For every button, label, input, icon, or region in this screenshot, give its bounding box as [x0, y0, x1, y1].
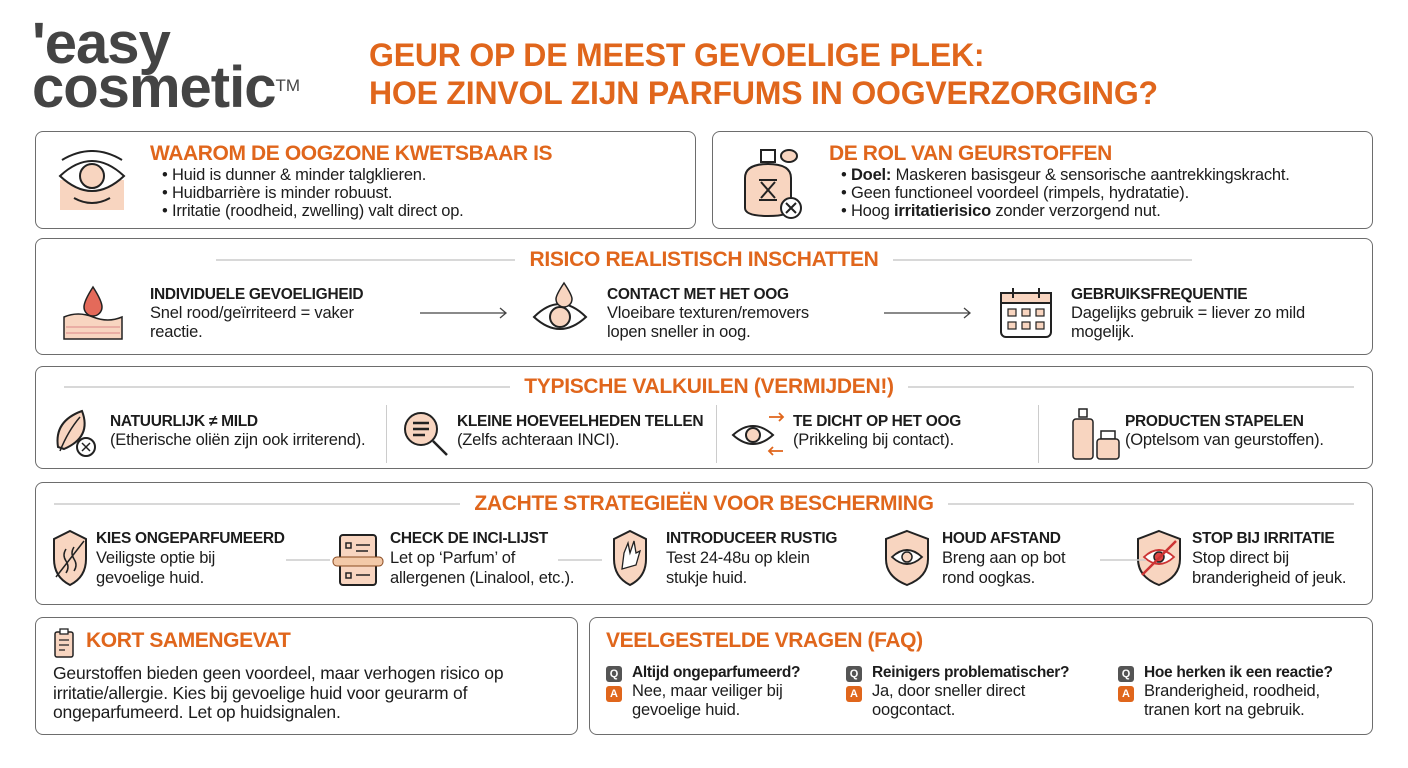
bullets: Hoog irritatierisico zonder verzorgend nut.	[851, 202, 1161, 220]
strategy: kies ongeparfumeerd: gevoelige huid.	[96, 569, 204, 587]
faq 2	[846, 664, 1069, 719]
panel: faq: Nee, maar veiliger bij	[632, 682, 783, 700]
item: gebruiksfrequentie: Dagelijks gebruik = liever zo mild	[1071, 304, 1305, 322]
item: producten stapelen: PRODUCTEN STAPELEN	[1125, 413, 1304, 430]
connector lines	[286, 559, 1146, 561]
panel: faq: Hoe herken ik een reactie?	[1144, 664, 1333, 681]
bullets: Huidbarrière is minder robuust.	[172, 184, 392, 202]
panel: risico realistisch inschatten	[35, 238, 1373, 355]
arrow	[420, 308, 507, 318]
strategy: kies ongeparfumeerd	[53, 530, 285, 587]
panel: faq: Branderigheid, roodheid,	[1144, 682, 1320, 700]
panel: faq: gevoelige huid.	[632, 701, 740, 719]
strategy: introduceer rustig: INTRODUCEER RUSTIG	[666, 530, 837, 547]
item: gebruiksfrequentie: GEBRUIKSFREQUENTIE	[1071, 286, 1247, 303]
faq 1	[606, 664, 800, 719]
icon: clipboard	[54, 628, 74, 658]
strategy: houd afstand: Breng aan op bot	[942, 549, 1065, 567]
strategy: kies ongeparfumeerd: Veiligste optie bij	[96, 549, 215, 567]
panel: faq: Ja, door sneller direct	[872, 682, 1025, 700]
strategy: check inci-lijst: CHECK DE INCI-LIJST	[390, 530, 548, 547]
logo	[32, 11, 300, 120]
strategy: stop bij irritatie	[1137, 530, 1346, 587]
logo: 'easy	[32, 11, 170, 76]
panel: rol van geurstoffen	[712, 131, 1373, 229]
item: producten stapelen	[1038, 405, 1358, 463]
strategy: check inci-lijst	[332, 530, 574, 587]
panel: zachte strategieen	[35, 482, 1373, 605]
item: te dicht op het oog: TE DICHT OP HET OOG	[793, 413, 961, 430]
section title: TYPISCHE VALKUILEN (VERMIJDEN!)	[524, 375, 894, 398]
icon: eye arrows	[732, 412, 784, 456]
heading: VEELGESTELDE VRAGEN (FAQ)	[606, 629, 923, 652]
bullets	[162, 166, 464, 220]
icon: eye drop	[532, 282, 588, 330]
summary text: Geurstoffen bieden geen voordeel, maar verhogen risico op	[53, 663, 503, 683]
panel: faq: Altijd ongeparfumeerd?	[632, 664, 800, 681]
strategy: check inci-lijst: allergenen (Linalool, etc.).	[390, 569, 574, 587]
item: te dicht op het oog: (Prikkeling bij contact).	[793, 431, 954, 449]
bullets: Irritatie (roodheid, zwelling) valt direct op.	[172, 202, 464, 220]
title: HOE ZINVOL ZIJN PARFUMS IN OOGVERZORGING?	[369, 75, 1158, 111]
item: te dicht op het oog	[716, 405, 1038, 463]
faq 3	[1118, 664, 1333, 719]
icon: eye	[58, 150, 126, 210]
item: contact met het oog: lopen sneller in oog.	[607, 323, 750, 341]
panel: faq	[589, 617, 1373, 735]
item: kleine hoeveelheden: KLEINE HOEVEELHEDEN TELLEN	[457, 413, 703, 430]
strategy: houd afstand: HOUD AFSTAND	[942, 530, 1061, 547]
strategy: stop bij irritatie: Stop direct bij	[1192, 549, 1289, 567]
item: contact met het oog: Vloeibare texturen/removers	[607, 304, 809, 322]
section title: RISICO REALISTISCH INSCHATTEN	[529, 248, 879, 271]
item: individuele gevoeligheid: INDIVIDUELE GEVOELIGHEID	[150, 286, 363, 303]
icon: leaf	[56, 410, 96, 457]
panel: faq: A	[850, 688, 858, 700]
title: GEUR OP DE MEEST GEVOELIGE PLEK:	[369, 37, 984, 73]
panel: waarom oogzone kwetsbaar	[35, 131, 696, 229]
item: kleine hoeveelheden: (Zelfs achteraan INCI).	[457, 431, 619, 449]
item: gebruiksfrequentie	[1071, 286, 1305, 341]
panel: faq: Reinigers problematischer?	[872, 664, 1069, 681]
item: natuurlijk mild	[110, 413, 365, 449]
strategy: stop bij irritatie: STOP BIJ IRRITATIE	[1192, 530, 1334, 547]
panel: faq: tranen kort na gebruik.	[1144, 701, 1304, 719]
summary text: irritatie/allergie. Kies bij gevoelige huid voor geurarm of	[53, 682, 467, 702]
bullets: Doel: Maskeren basisgeur & sensorische aantrekkingskracht.	[851, 166, 1290, 184]
item: individuele gevoeligheid	[150, 286, 363, 341]
strategy: houd afstand: rond oogkas.	[942, 569, 1035, 587]
strategy: introduceer rustig	[613, 530, 837, 587]
bullets: Huid is dunner & minder talgklieren.	[172, 166, 426, 184]
icon: bottles	[1072, 408, 1120, 460]
strategy: introduceer rustig: stukje huid.	[666, 569, 747, 587]
bullets	[842, 166, 1290, 220]
item: natuurlijk mild: (Etherische oliën zijn ook irriterend).	[110, 431, 365, 449]
item: individuele gevoeligheid: reactie.	[150, 323, 203, 341]
strategy: introduceer rustig: Test 24-48u op klein	[666, 549, 810, 567]
panel: faq: oogcontact.	[872, 701, 955, 719]
panel: faq: Q	[610, 668, 618, 680]
panel: faq: A	[610, 688, 618, 700]
panel: faq: A	[1122, 688, 1130, 700]
title	[369, 37, 1158, 111]
item: contact met het oog	[607, 286, 809, 341]
strategy: houd afstand	[885, 530, 1066, 587]
strategy: kies ongeparfumeerd: KIES ONGEPARFUMEERD	[96, 530, 285, 547]
arrow	[884, 308, 971, 318]
icon: skin drop	[63, 286, 123, 340]
heading: DE ROL VAN GEURSTOFFEN	[829, 142, 1112, 165]
icon: magnifier list	[404, 412, 448, 456]
item: gebruiksfrequentie: mogelijk.	[1071, 323, 1134, 341]
item: individuele gevoeligheid: Snel rood/geïrriteerd = vaker	[150, 304, 354, 322]
summary text	[53, 663, 503, 722]
strategy: stop bij irritatie: branderigheid of jeuk.	[1192, 569, 1346, 587]
item: kleine hoeveelheden	[386, 405, 716, 463]
logo: cosmeticTM	[32, 55, 300, 120]
bullets: Geen functioneel voordeel (rimpels, hydratatie).	[851, 184, 1189, 202]
panel: typische valkuilen	[35, 366, 1373, 469]
icon: perfume bottle	[744, 149, 802, 219]
heading: WAAROM DE OOGZONE KWETSBAAR IS	[150, 142, 552, 165]
strategy: check inci-lijst: Let op ‘Parfum’ of	[390, 549, 515, 567]
summary text: ongeparfumeerd. Let op huidsignalen.	[53, 702, 341, 722]
icon: calendar	[1000, 288, 1052, 338]
heading: KORT SAMENGEVAT	[86, 629, 290, 652]
panel: faq: Q	[1122, 668, 1130, 680]
item: contact met het oog: CONTACT MET HET OOG	[607, 286, 789, 303]
item: producten stapelen: (Optelsom van geurstoffen).	[1125, 431, 1324, 449]
section title: ZACHTE STRATEGIEËN VOOR BESCHERMING	[474, 492, 934, 515]
panel: faq: Q	[850, 668, 858, 680]
item: natuurlijk mild: NATUURLIJK ≠ MILD	[110, 413, 258, 430]
panel: kort samengevat	[35, 617, 578, 735]
